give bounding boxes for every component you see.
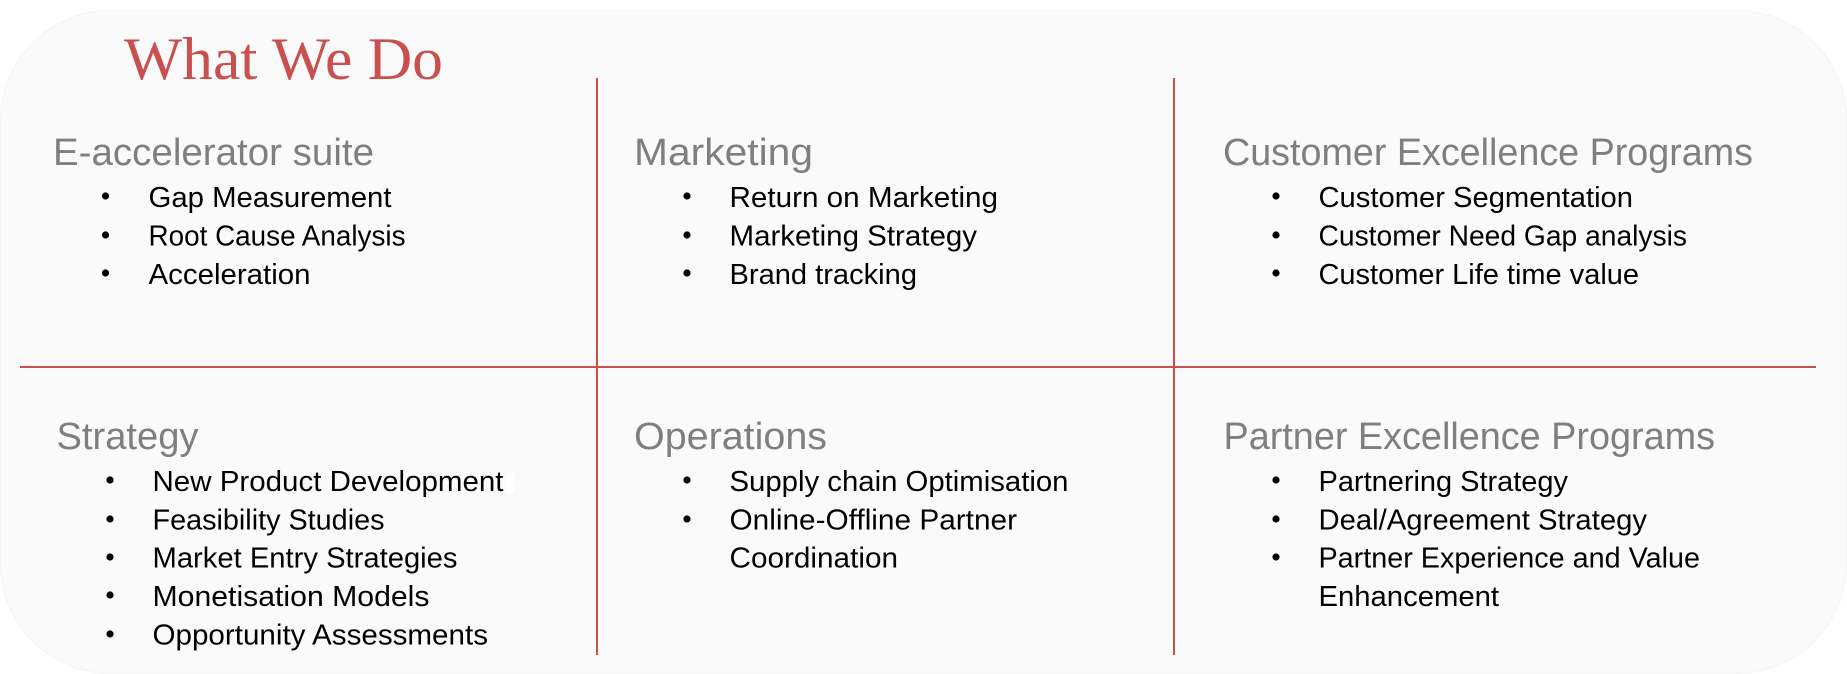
panel: Marketing: Marketing Strategy — [730, 220, 978, 252]
panel: Partner Excellence Programs: Enhancement — [1318, 581, 1499, 613]
panel: Partner Excellence Programs: Partner Experience and Value — [1318, 542, 1700, 574]
panel: E-accelerator suite: Gap Measurement — [148, 182, 392, 214]
panel: Marketing — [634, 132, 998, 291]
panel: Partner Excellence Programs: Partner Excellence Programs — [1224, 416, 1715, 458]
panel: Strategy: Monetisation Models — [152, 581, 429, 613]
panel: Strategy: Feasibility Studies — [152, 504, 384, 536]
panel: Partner Excellence Programs: Deal/Agreement Strategy — [1318, 504, 1647, 536]
panel: Marketing: Marketing — [634, 132, 813, 174]
panel: Operations: Coordination — [730, 542, 898, 574]
panel: Strategy: Strategy — [56, 416, 198, 458]
panel: Customer Excellence Programs — [1223, 132, 1753, 291]
panel: Marketing: Return on Marketing — [730, 182, 998, 214]
panel: E-accelerator suite: Acceleration — [148, 259, 310, 291]
panel: Customer Excellence Programs: Customer Life time value — [1318, 259, 1639, 291]
panel: Operations — [634, 416, 1068, 574]
panel: Strategy: New Product Development — [152, 466, 504, 498]
panel: Strategy — [56, 416, 515, 652]
panel: E-accelerator suite: E-accelerator suite — [53, 132, 374, 174]
panel: Customer Excellence Programs: Customer Segmentation — [1318, 182, 1633, 214]
panel: Customer Excellence Programs: Customer Need Gap analysis — [1318, 220, 1687, 252]
panel: Operations: Online-Offline Partner — [730, 504, 1017, 536]
panel: Operations: Operations — [634, 416, 827, 458]
panel: Strategy: Market Entry Strategies — [152, 542, 458, 574]
panel: E-accelerator suite: Root Cause Analysis — [148, 220, 406, 252]
panel: Operations: Supply chain Optimisation — [730, 466, 1068, 498]
panel: Marketing: Brand tracking — [730, 259, 917, 291]
panel: Partner Excellence Programs — [1224, 416, 1715, 613]
panel: Partner Excellence Programs: Partnering Strategy — [1318, 466, 1568, 498]
panel: Strategy: Opportunity Assessments — [152, 620, 488, 652]
title: What We Do — [124, 26, 443, 92]
panel: Customer Excellence Programs: Customer Excellence Programs — [1223, 132, 1753, 174]
panel: E-accelerator suite — [53, 132, 406, 291]
